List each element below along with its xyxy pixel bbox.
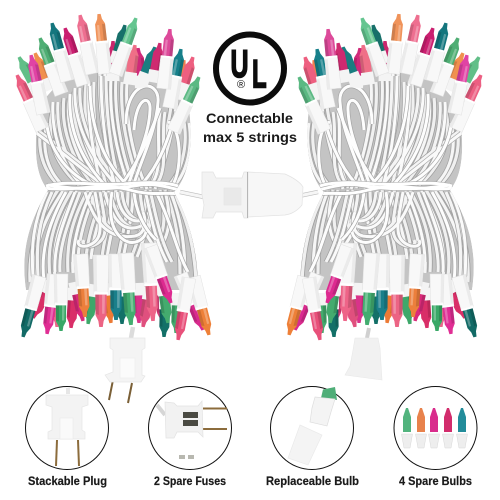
caption: connectable max 5 strings: Connectable [206, 110, 293, 126]
label: spare bulbs: 4 Spare Bulbs [399, 476, 472, 488]
loose plug end [105, 327, 145, 403]
label: spare fuses: 2 Spare Fuses [154, 476, 226, 488]
left light string bundle [11, 13, 216, 341]
icon: UL logo [216, 34, 284, 102]
caption: connectable max 5 strings: max 5 strings [203, 129, 297, 145]
icon: UL logo: ® [237, 79, 245, 91]
central connector joining the two strings [202, 172, 303, 218]
icon: five bulbs [402, 408, 468, 448]
panel: spare fuses [148, 386, 232, 470]
label: replaceable bulb: Replaceable Bulb [266, 476, 359, 488]
icon: UL logo: U [230, 41, 249, 85]
panel: replaceable bulb [270, 386, 354, 470]
loose socket end [345, 328, 382, 380]
icon: two fuses [179, 455, 194, 459]
caption: connectable max 5 strings [203, 110, 297, 145]
icon: UL logo: L [252, 51, 267, 96]
label: stackable plug: Stackable Plug [28, 476, 107, 488]
panel: spare bulbs [394, 386, 477, 470]
right light string bundle [282, 13, 487, 341]
panel: stackable plug [26, 386, 108, 470]
